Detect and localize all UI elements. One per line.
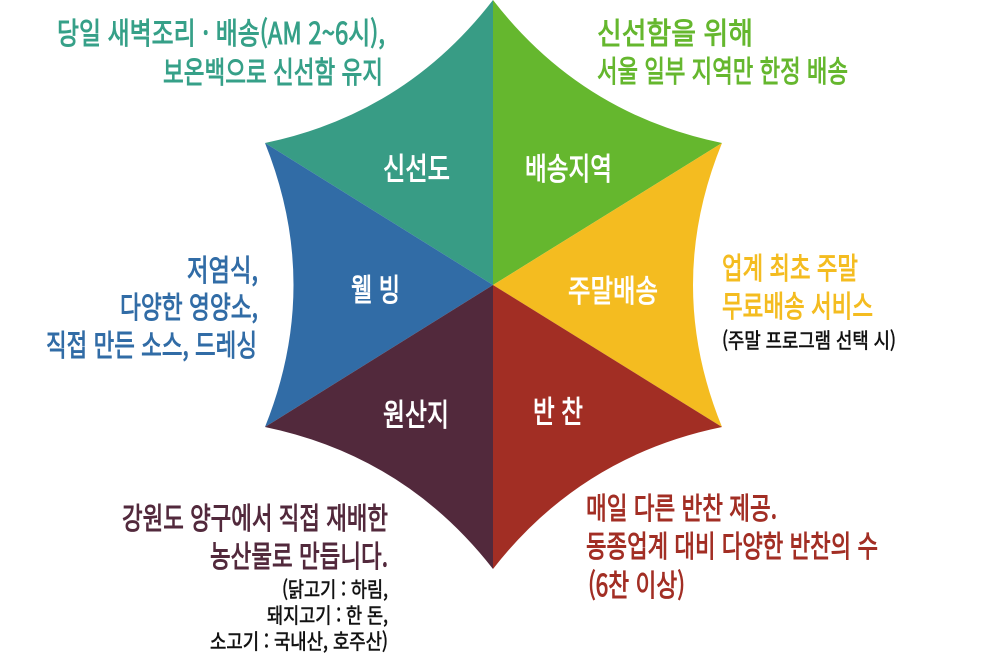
text block: 원산지 설명: 강원도 양구에서 직접 재배한 [122, 494, 388, 538]
text block: 신선도 설명: 보온백으로 신선함 유지 [163, 48, 383, 92]
label: 배송지역: 배송지역 [525, 144, 612, 189]
label: 신선도: 신선도 [383, 144, 450, 189]
text block: 원산지 설명 [122, 494, 388, 654]
text block: 배송지역 설명: 신선함을 위해 [597, 9, 753, 53]
text block: 원산지 설명: 돼지고기 : 한 돈, [267, 600, 388, 630]
label: 원산지: 원산지 [383, 390, 449, 435]
text block: 배송지역 설명 [597, 9, 848, 91]
text block: 신선도 설명 [57, 9, 385, 92]
label: 주말배송: 주말배송 [568, 266, 658, 311]
text block: 주말배송 설명 [722, 244, 896, 355]
text block: 원산지 설명: (닭고기 : 하림, [282, 574, 388, 604]
segment: 배송지역 [493, 0, 722, 285]
text block: 반찬 설명 [586, 484, 878, 605]
label: 반 찬: 반 찬 [533, 387, 583, 432]
text block: 신선도 설명: 당일 새벽조리 · 배송(AM 2~6시), [57, 9, 385, 53]
text block: 원산지 설명: 농산물로 만듭니다. [210, 532, 388, 576]
text block: 웰빙 설명: 직접 만든 소스, 드레싱 [46, 321, 257, 365]
segment: 반찬 [493, 285, 722, 569]
text block: 웰빙 설명: 다양한 영양소, [120, 283, 258, 327]
text block: 주말배송 설명: (주말 프로그램 선택 시) [722, 325, 896, 355]
text block: 반찬 설명: 동종업계 대비 다양한 반찬의 수 [586, 522, 878, 566]
label: 웰 빙: 웰 빙 [351, 265, 400, 310]
segment: 신선도 [265, 0, 493, 285]
segment: 웰빙 [265, 143, 493, 427]
segment: 주말배송 [493, 143, 722, 427]
text block: 배송지역 설명: 서울 일부 지역만 한정 배송 [597, 47, 848, 91]
text block: 반찬 설명: (6찬 이상) [588, 561, 685, 605]
text block: 웰빙 설명 [46, 246, 258, 365]
text block: 주말배송 설명: 무료배송 서비스 [722, 282, 873, 326]
text block: 주말배송 설명: 업계 최초 주말 [722, 244, 858, 288]
segment: 원산지 [265, 285, 493, 569]
text block: 웰빙 설명: 저염식, [187, 246, 258, 290]
text block: 반찬 설명: 매일 다른 반찬 제공. [586, 484, 777, 528]
